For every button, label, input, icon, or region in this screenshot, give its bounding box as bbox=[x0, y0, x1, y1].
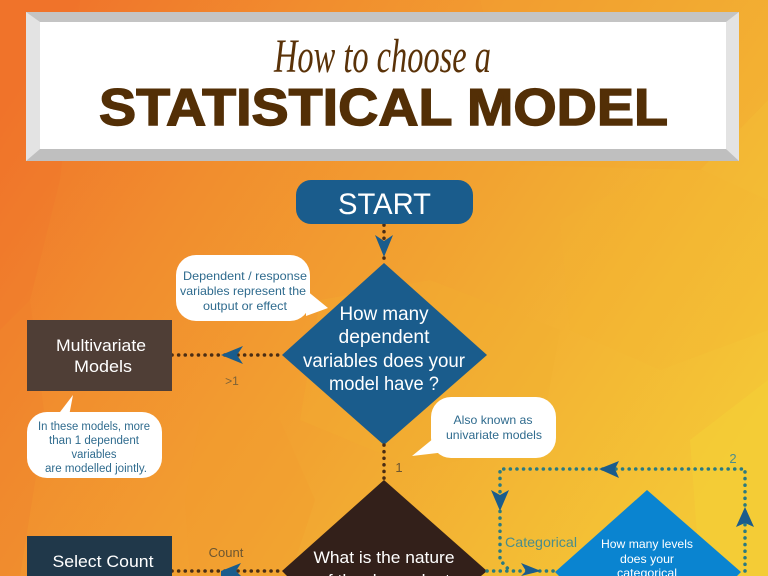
select count models box: Select Count bbox=[52, 552, 154, 571]
question diamond: nature of dependent bbox=[282, 480, 487, 576]
multivariate models box bbox=[27, 320, 172, 391]
multivariate models box: Models bbox=[74, 357, 132, 376]
start box: START bbox=[338, 188, 431, 221]
multivariate models box: Multivariate bbox=[56, 336, 146, 355]
callout: dependent variables: Dependent / response bbox=[183, 269, 307, 283]
label: count: Count bbox=[209, 545, 244, 560]
label: categorical: Categorical bbox=[505, 534, 577, 550]
select count models box bbox=[27, 536, 172, 576]
connector to count models bbox=[172, 563, 283, 576]
connector to multivariate bbox=[172, 346, 282, 364]
callout: dependent variables: variables represent the bbox=[180, 284, 306, 298]
callout: dependent variables bbox=[176, 255, 328, 321]
title: how to choose a: How to choose a bbox=[273, 30, 491, 83]
label: one: 1 bbox=[395, 460, 403, 475]
question diamond: dependent variables: How many bbox=[340, 304, 429, 325]
callout: univariate bbox=[412, 397, 556, 458]
start box bbox=[296, 180, 473, 224]
connector loop: categorical levels bbox=[487, 461, 754, 576]
question diamond: levels bbox=[555, 490, 741, 576]
question diamond: dependent variables bbox=[282, 263, 487, 445]
question diamond: levels: How many levels bbox=[601, 537, 693, 551]
title: statistical model: STATISTICAL MODEL bbox=[99, 79, 668, 137]
title frame bbox=[26, 12, 739, 161]
question diamond: dependent variables: dependent bbox=[338, 327, 430, 348]
callout: multivariate explanation: than 1 dependent bbox=[49, 435, 140, 447]
callout: multivariate explanation: are modelled jointly. bbox=[45, 463, 147, 475]
question diamond: nature of dependent: What is the nature bbox=[314, 548, 454, 567]
start to first question connector bbox=[375, 225, 393, 263]
callout: multivariate explanation: variables bbox=[72, 449, 117, 461]
label: more than one: >1 bbox=[225, 374, 239, 388]
callout: multivariate explanation bbox=[27, 395, 162, 478]
callout: multivariate explanation: In these models, more bbox=[38, 421, 150, 433]
callout: univariate: Also known as bbox=[454, 413, 532, 427]
connector between questions bbox=[382, 445, 386, 480]
question diamond: levels: does your bbox=[620, 552, 674, 566]
question diamond: dependent variables: variables does your bbox=[303, 351, 466, 372]
label: two: 2 bbox=[729, 451, 737, 466]
callout: dependent variables: output or effect bbox=[203, 299, 288, 313]
callout: univariate: univariate models bbox=[446, 428, 542, 442]
question diamond: dependent variables: model have ? bbox=[329, 374, 439, 395]
